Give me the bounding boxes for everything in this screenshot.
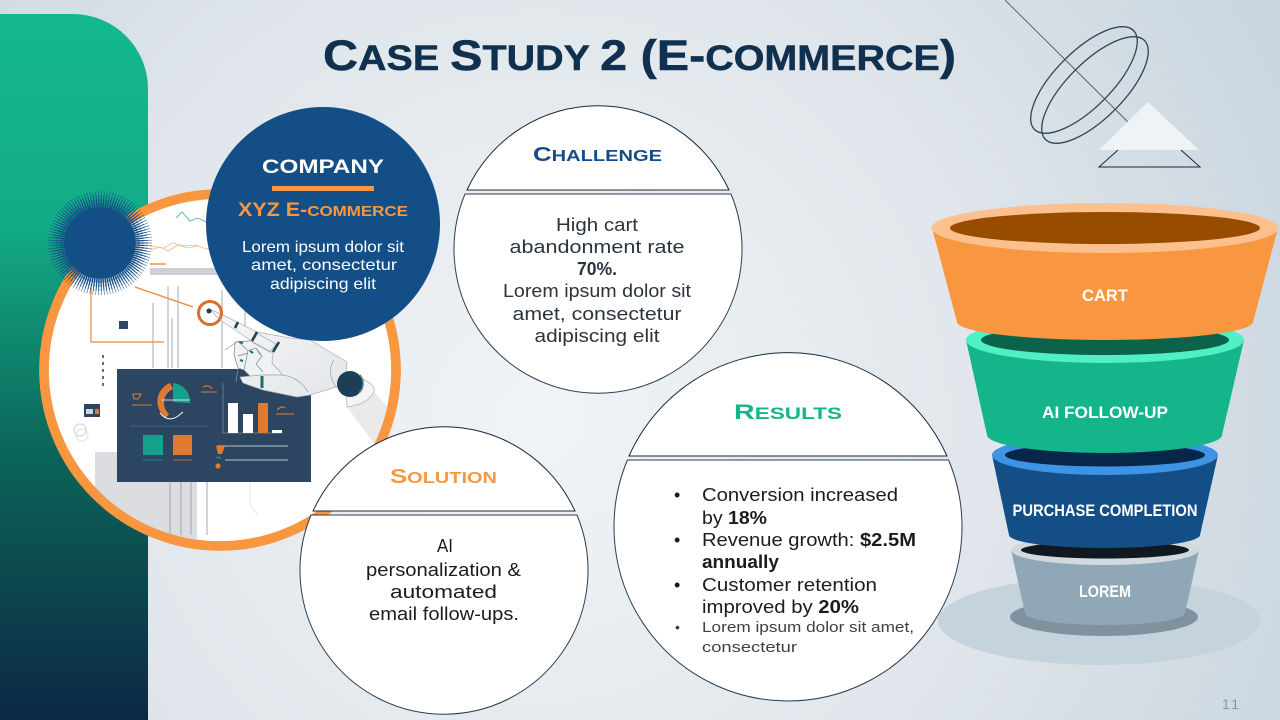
decorative line art [1005,0,1200,167]
challenge text: amet, consectetur [512,304,682,324]
results bullet list [674,485,916,656]
icon: navy sunburst [50,193,150,293]
results bullet list: improved by 20% [702,597,859,617]
panel: results [614,353,962,701]
company description: amet, consectetur [251,257,398,274]
solution text: personalization & [366,560,521,580]
challenge text: Lorem ipsum dolor sit [503,281,691,301]
results bullet list: • [674,530,680,550]
funnel tier: lorem [1011,535,1199,625]
results bullet list: by 18% [702,508,767,528]
icon: small card [84,404,100,417]
funnel tier: lorem: LOREM [1079,582,1131,601]
solution text: email follow-ups. [369,604,519,624]
left gradient band [0,14,148,720]
funnel tier: AI follow-up: AI FOLLOW-UP [1042,403,1168,422]
results bullet list: Lorem ipsum dolor sit amet, [702,619,914,636]
panel: company [206,107,440,341]
dashboard panel [117,369,311,482]
challenge text: 70%. [577,259,617,279]
company heading: COMPANY [262,157,384,178]
panel: solution [300,427,588,714]
page number: 11 [1222,696,1239,712]
funnel tier: purchase completion: PURCHASE COMPLETION [1012,501,1198,520]
icon: small chip [119,321,128,329]
challenge heading: C HALLENGE [533,144,662,166]
solution text: AI [437,536,453,556]
company description [242,239,405,293]
robot hand [198,302,410,445]
solution text: automated [390,582,497,602]
challenge text: adipiscing elit [534,326,660,346]
challenge text: High cart [556,215,638,235]
funnel tier: cart: CART [1082,286,1129,305]
challenge text [503,215,691,346]
results bullet list: Conversion increased [702,485,898,505]
funnel tier: AI follow-up [966,317,1244,453]
results bullet list: Customer retention [702,575,877,595]
solution heading: SOLUTION [390,466,497,488]
illustration: AI robot hand and dashboard [44,194,410,546]
results bullet list: • [674,575,680,595]
funnel chart [932,203,1278,665]
challenge text: abandonment rate [510,237,684,257]
company name: XYZ E- COMMERCE [238,200,408,221]
company description: Lorem ipsum dolor sit [242,239,405,256]
funnel tier: cart [932,203,1278,340]
company description: adipiscing elit [270,276,377,293]
funnel tier: purchase completion [992,435,1218,548]
panel: challenge [454,106,742,393]
results bullet list: • [675,619,680,635]
results bullet list: consectetur [702,639,797,656]
results bullet list: • [674,485,680,505]
solution text [366,536,521,624]
results bullet list: Revenue growth: $2.5M [702,530,916,550]
results bullet list: annually [702,552,779,572]
results heading: R ESULTS [734,401,842,424]
title: CASE STUDY 2 (E- COMMERCE ) [323,32,956,80]
